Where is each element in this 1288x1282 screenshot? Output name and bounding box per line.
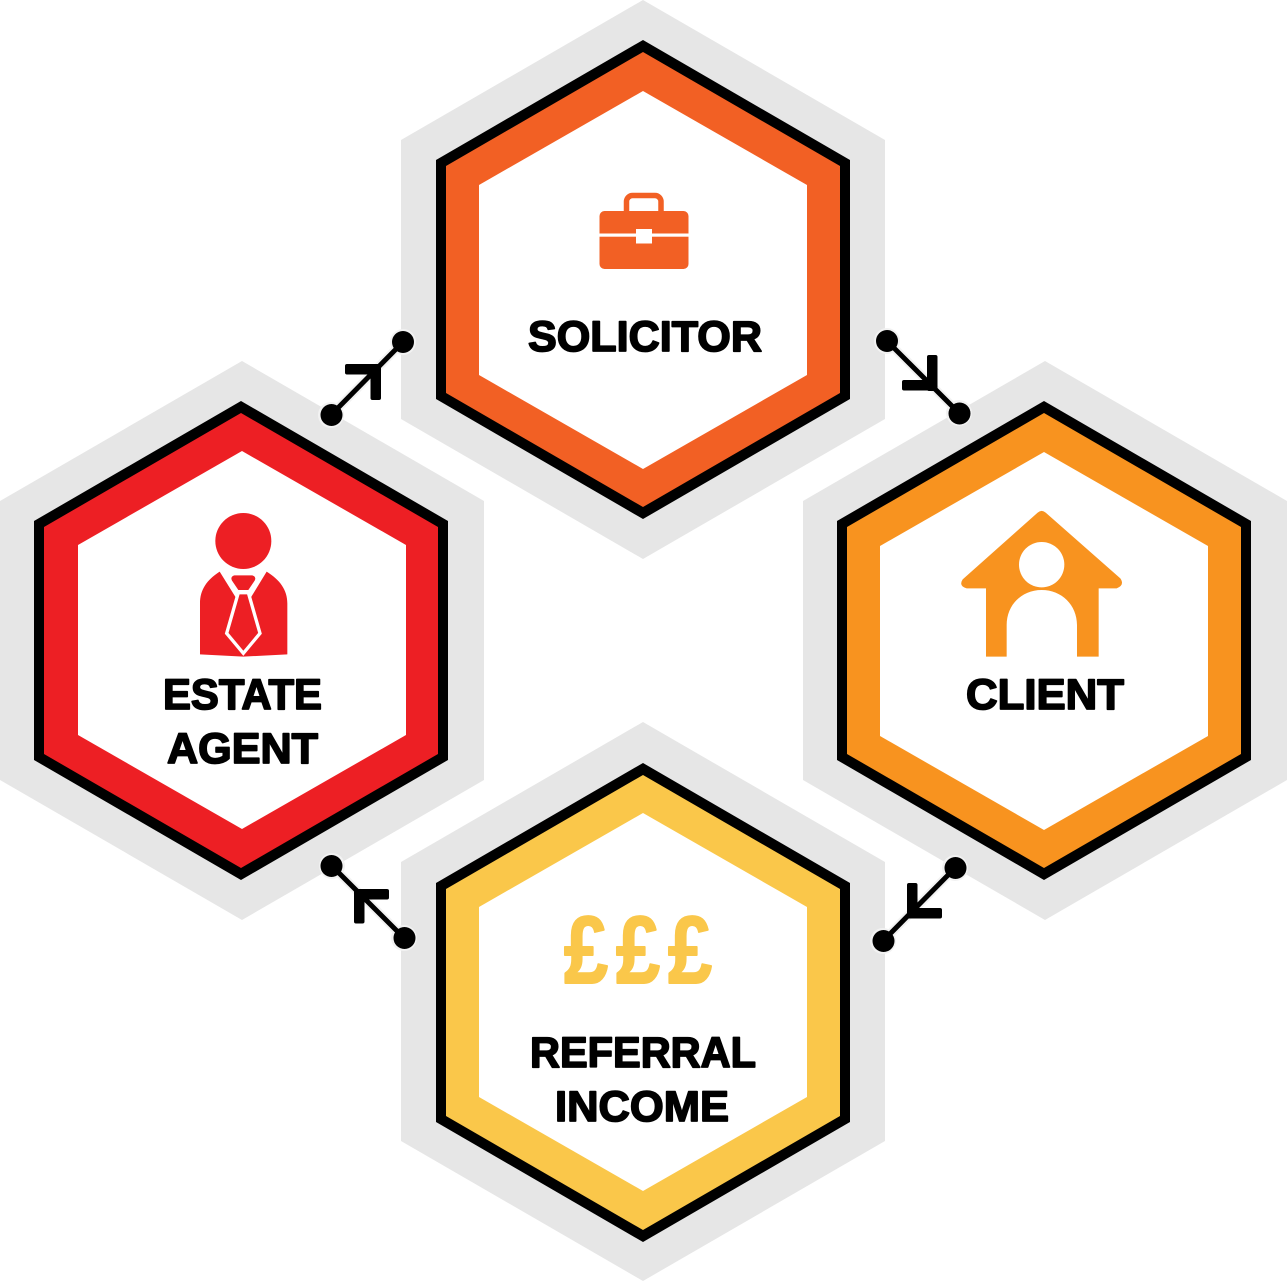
panel: solicitor hexagon [401, 0, 885, 559]
arrow: estate agent to solicitor [318, 329, 416, 428]
arrow: client to referral income [870, 855, 968, 954]
heading: estate: ESTATE [163, 671, 322, 719]
icon: briefcase [599, 196, 689, 269]
icon: pound signs: £ [668, 897, 712, 1004]
icon: pound signs [564, 897, 712, 1004]
icon: pound signs: £ [616, 897, 660, 1004]
arrow: referral income to estate agent [319, 853, 417, 951]
heading: income: INCOME [555, 1083, 729, 1131]
panel: referral income hexagon [401, 722, 885, 1281]
heading: client: CLIENT [966, 671, 1124, 719]
arrow: solicitor to client [874, 328, 972, 426]
heading: solicitor: SOLICITOR [528, 313, 762, 361]
heading: agent: AGENT [167, 725, 318, 773]
icon: businessman with tie [200, 513, 287, 657]
icon: pound signs: £ [564, 897, 608, 1004]
heading: referral: REFERRAL [530, 1029, 756, 1077]
icon: house with person [961, 511, 1122, 657]
panel: client hexagon [803, 361, 1287, 920]
panel: estate agent hexagon [0, 361, 484, 920]
